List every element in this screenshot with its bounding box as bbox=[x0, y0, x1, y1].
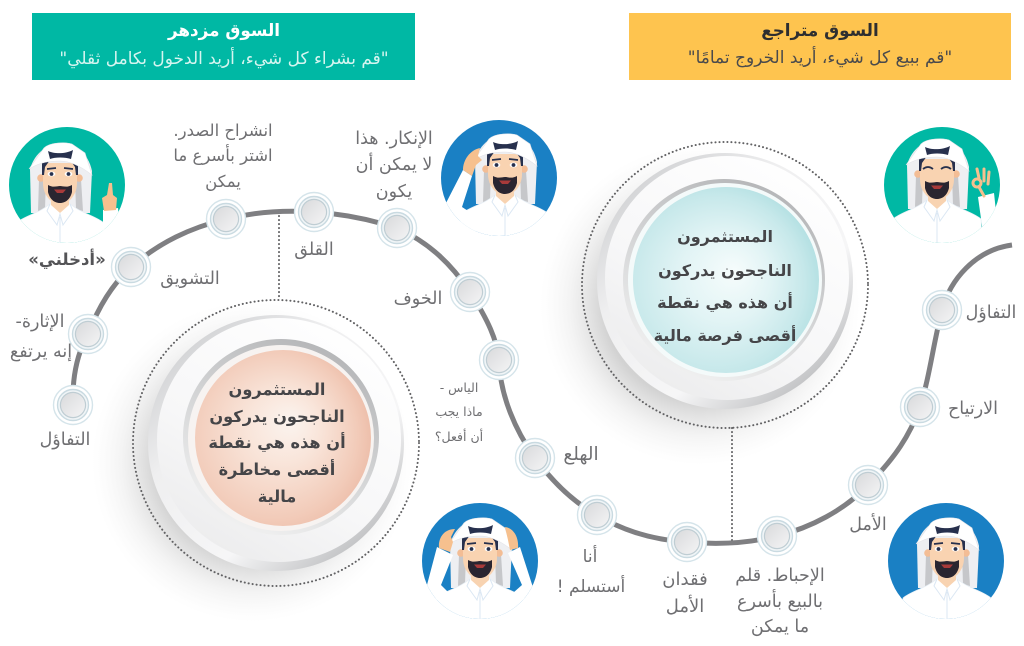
labels: cycle stages: يمكن bbox=[205, 172, 241, 191]
label: give up: أنا bbox=[583, 545, 597, 567]
label: hopelessness: فقدان bbox=[662, 569, 708, 590]
icon: man hand on head bbox=[441, 120, 557, 236]
labels: cycle stages: لا يمكن أن bbox=[356, 152, 432, 175]
labels: cycle stages: أستسلم ! bbox=[557, 575, 625, 597]
label: anxiety: القلق bbox=[294, 240, 334, 260]
label: relief right: الارتياح bbox=[948, 399, 998, 419]
label: excitement: الإثارة- bbox=[16, 312, 64, 332]
opportunity text bbox=[654, 227, 796, 345]
icon: man thumbs up bbox=[9, 127, 125, 243]
label: despair: الياس - bbox=[440, 380, 478, 396]
opportunity text: أقصى فرصة مالية bbox=[654, 325, 796, 345]
header: bear market bbox=[629, 13, 1011, 80]
bull market title: السوق مزدهر bbox=[167, 20, 280, 41]
label: optimism left: التفاؤل bbox=[40, 430, 90, 450]
label: anticipation: التشويق bbox=[160, 269, 220, 289]
labels: cycle stages: ماذا يجب bbox=[435, 404, 483, 419]
opportunity text: أن هذه هي نقطة bbox=[657, 292, 793, 313]
label: capitulation: الإحباط. قلم bbox=[735, 566, 825, 586]
label: denial: الإنكار. هذا bbox=[355, 129, 433, 149]
risk text: مالية bbox=[258, 487, 296, 506]
risk text bbox=[208, 380, 346, 506]
label: let me in: «أدخلني» bbox=[28, 249, 106, 270]
panel: risk plate bbox=[92, 300, 419, 622]
label: fear: الخوف bbox=[394, 289, 442, 309]
labels: cycle stages: ما يمكن bbox=[751, 617, 809, 637]
labels: cycle stages: أن أفعل؟ bbox=[435, 428, 483, 444]
connector: right plate to curve bbox=[731, 428, 733, 545]
curve nodes bbox=[54, 192, 962, 562]
labels: cycle stages: اشتر بأسرع ما bbox=[173, 144, 273, 166]
opportunity text: الناجحون يدركون bbox=[658, 261, 792, 280]
opportunity text: المستثمرون bbox=[677, 227, 773, 246]
panel: opportunity plate bbox=[540, 142, 868, 465]
labels: cycle stages bbox=[10, 121, 1016, 637]
risk text: المستثمرون bbox=[229, 380, 325, 399]
risk text: أن هذه هي نقطة bbox=[208, 432, 346, 453]
icon: man neutral bbox=[888, 503, 1004, 619]
icon: man both hands on head bbox=[422, 503, 538, 619]
risk text: أقصى مخاطرة bbox=[219, 459, 335, 479]
connector: left plate to curve bbox=[278, 212, 280, 298]
label: optimism right: التفاؤل bbox=[966, 303, 1016, 323]
labels: cycle stages: إنه يرتفع bbox=[10, 342, 72, 362]
market cycle curve bbox=[73, 211, 1012, 543]
labels: cycle stages: الأمل bbox=[666, 595, 704, 617]
header: bull market bbox=[32, 13, 415, 80]
label: relief: انشراح الصدر. bbox=[173, 121, 273, 141]
bull market quote: "قم بشراء كل شيء، أريد الدخول بكامل ثقلي" bbox=[59, 47, 389, 69]
labels: cycle stages: بالبيع بأسرع bbox=[737, 589, 823, 612]
icon: man okay sign bbox=[884, 127, 1000, 243]
label: panic: الهلع bbox=[563, 444, 599, 465]
labels: cycle stages: يكون bbox=[376, 182, 412, 202]
bear market quote: "قم ببيع كل شيء، أريد الخروج تمامًا" bbox=[688, 46, 952, 68]
label: hope: الأمل bbox=[849, 513, 887, 535]
bear market title: السوق متراجع bbox=[761, 20, 879, 41]
risk text: الناجحون يدركون bbox=[209, 407, 345, 426]
